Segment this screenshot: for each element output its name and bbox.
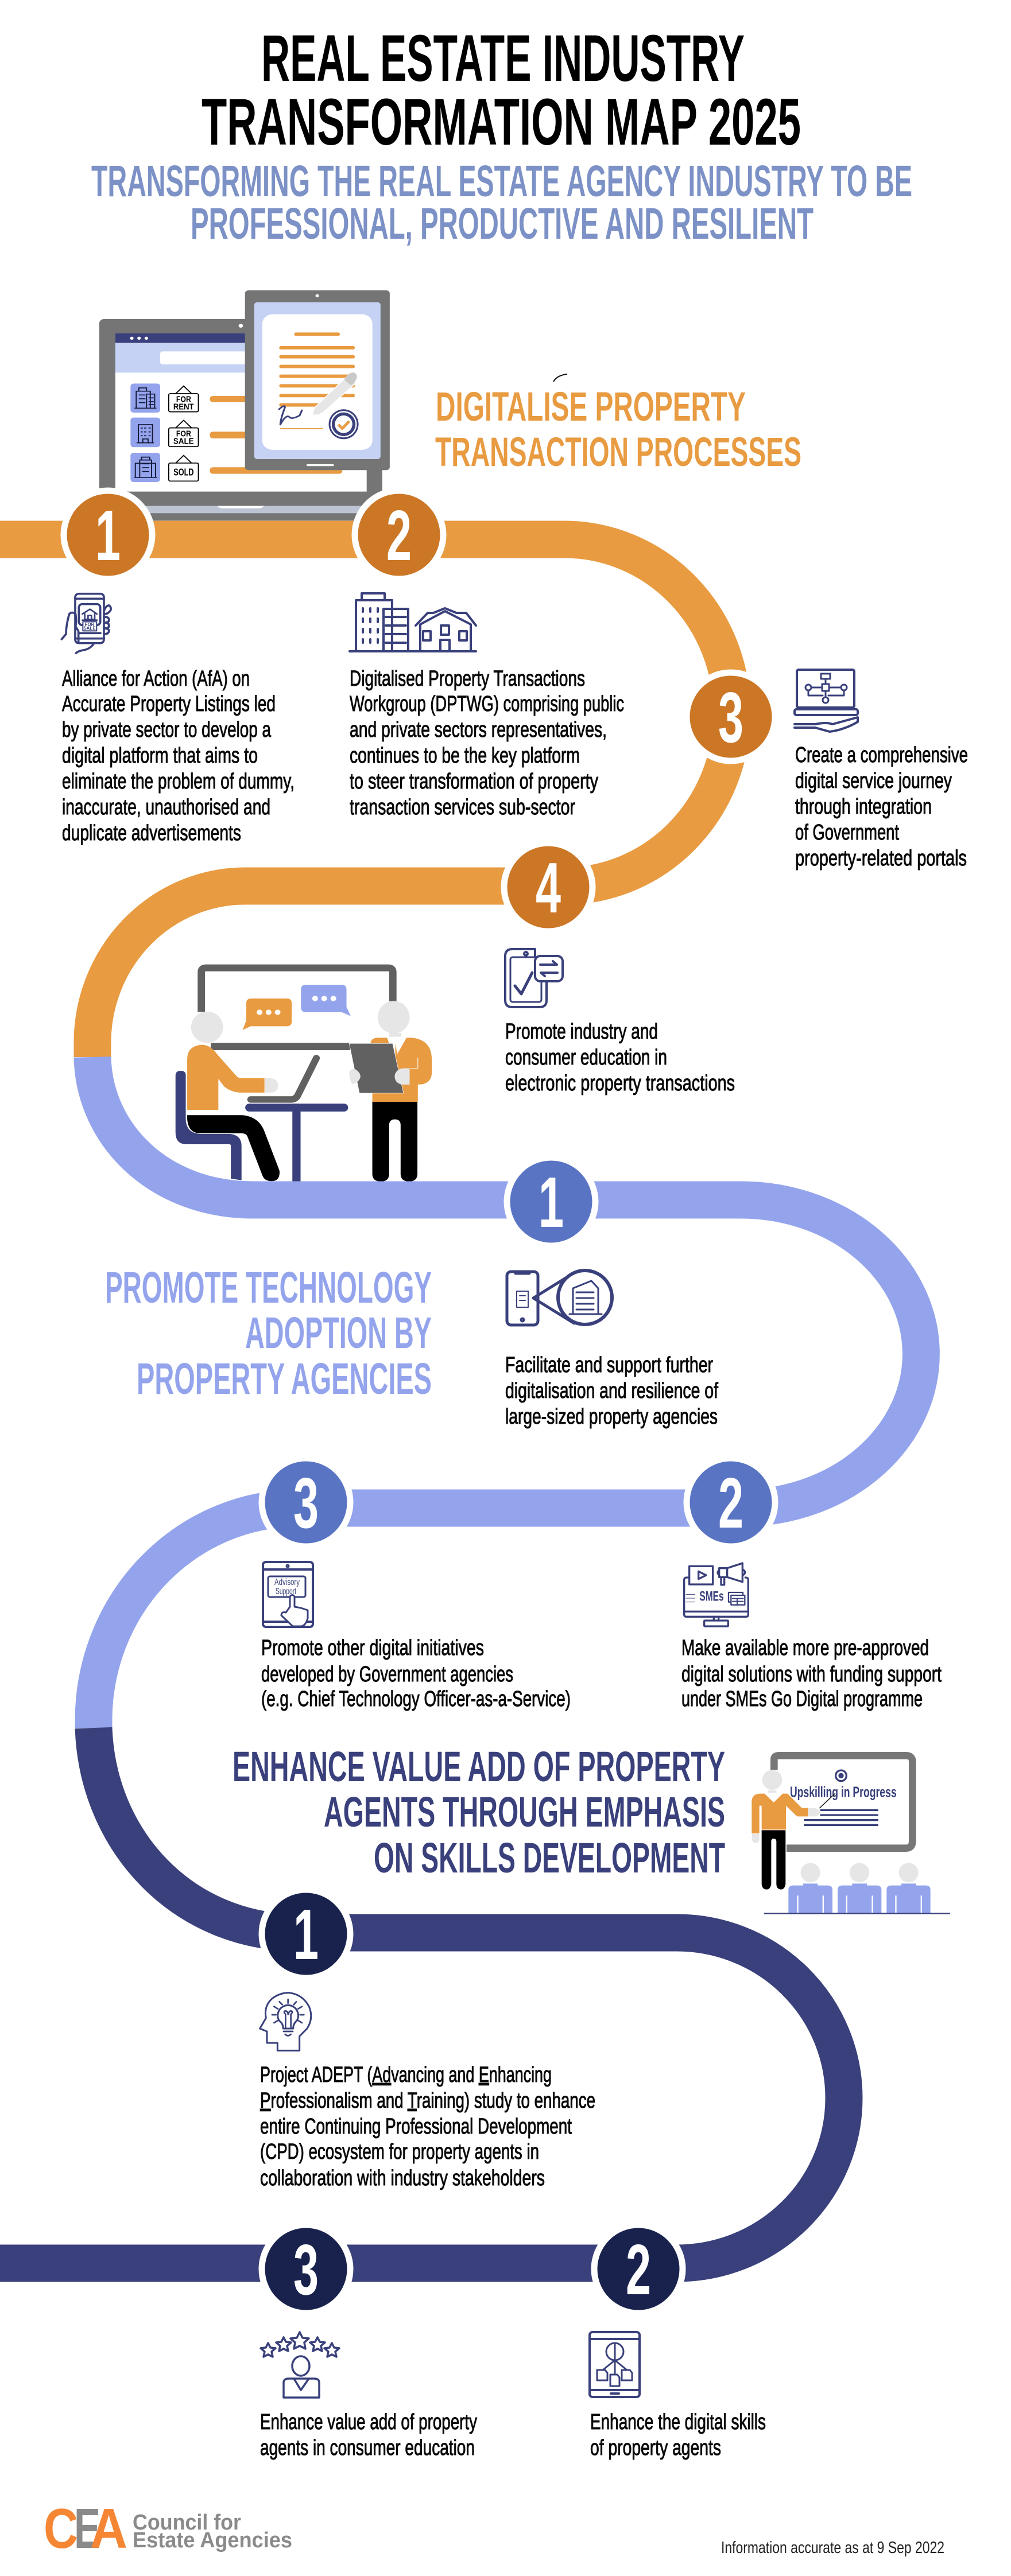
text xyxy=(681,1636,942,1711)
logo: Council for Estate Agencies: E xyxy=(74,2497,100,2560)
text: Promote other digital initiatives xyxy=(261,1636,484,1660)
heading: enhance value add: AGENTS THROUGH EMPHASIS xyxy=(324,1788,725,1836)
text: Enhance value add of property xyxy=(260,2410,477,2434)
road: periwinkle section xyxy=(92,1057,921,1728)
text xyxy=(260,2410,477,2460)
step marker 4 xyxy=(504,843,592,931)
heading: enhance value add xyxy=(233,1743,725,1882)
icon: phone with property listing xyxy=(61,594,111,653)
step marker 2: 2 xyxy=(386,496,412,576)
text xyxy=(260,2063,595,2190)
step marker 1 xyxy=(507,1157,595,1246)
heading: promote technology xyxy=(105,1263,432,1404)
icon: SME monitor with megaphone: SMEs xyxy=(699,1588,724,1604)
road: navy section xyxy=(0,1728,844,2263)
text xyxy=(590,2410,766,2460)
text xyxy=(505,1020,735,1095)
illustration: laptop and tablet with property listings: RENT xyxy=(173,402,194,411)
step marker 2 xyxy=(355,491,443,579)
step marker 3 xyxy=(262,2225,350,2313)
step marker 1 xyxy=(64,491,152,579)
text: entire Continuing Professional Development xyxy=(260,2115,572,2139)
text: Professionalism and Training) study to enhance xyxy=(260,2089,595,2113)
panel: digitalise step 4 xyxy=(504,843,735,1095)
illustration: laptop and tablet with property listings xyxy=(99,290,390,520)
text: developed by Government agencies xyxy=(261,1662,513,1687)
text: collaboration with industry stakeholders xyxy=(260,2166,545,2190)
text: agents in consumer education xyxy=(260,2436,475,2460)
icon: phone linked to office building xyxy=(507,1270,612,1325)
text: consumer education in xyxy=(505,1046,667,1070)
heading: digitalise xyxy=(435,384,801,475)
step marker 3: 3 xyxy=(293,1464,319,1543)
panel: digitalise step 3 xyxy=(687,670,968,871)
step marker 1: 1 xyxy=(95,496,121,576)
illustration: laptop and tablet with property listings: SALE xyxy=(173,437,194,446)
text: digital service journey xyxy=(795,769,952,793)
heading: enhance value add: ON SKILLS DEVELOPMENT xyxy=(374,1834,725,1882)
step marker 1: 1 xyxy=(293,1895,319,1975)
step marker 3: 3 xyxy=(718,678,743,757)
text: digitalisation and resilience of xyxy=(505,1379,718,1403)
step marker 2 xyxy=(687,1458,775,1547)
step marker 3 xyxy=(262,1458,350,1547)
icon: head with light bulb xyxy=(260,1993,311,2050)
logo: Council for Estate Agencies xyxy=(44,2497,292,2560)
text: electronic property transactions xyxy=(505,1071,735,1095)
icon: laptop flowchart and hand xyxy=(795,670,858,732)
step marker 4: 4 xyxy=(536,849,561,928)
decorative stroke mark near heading xyxy=(553,374,567,382)
panel: skills step 2 xyxy=(590,2225,766,2460)
panel: skills step 1 xyxy=(260,1890,595,2190)
heading: digitalise: TRANSACTION PROCESSES xyxy=(435,430,801,475)
text: to steer transformation of property xyxy=(350,770,598,794)
text: Alliance for Action (AfA) on xyxy=(62,667,250,691)
logo: Council for Estate Agencies: C xyxy=(44,2497,78,2560)
illustration: laptop and tablet with property listings: FOR xyxy=(176,395,191,404)
panel: skills step 3 xyxy=(260,2225,477,2460)
step marker 1: 1 xyxy=(539,1163,564,1242)
icon: SME monitor with megaphone xyxy=(684,1563,748,1626)
step marker 2: 2 xyxy=(718,1464,743,1543)
footer note: Information accurate as at 9 Sep 2022 xyxy=(721,2539,944,2557)
illustration: upskilling presentation xyxy=(752,1755,950,1914)
logo: Council for Estate Agencies: A xyxy=(90,2497,127,2560)
heading: enhance value add: ENHANCE VALUE ADD OF PROPERTY xyxy=(233,1743,725,1790)
text: Make available more pre-approved xyxy=(681,1636,929,1660)
logo: Council for Estate Agencies: Council for xyxy=(133,2511,241,2535)
text: digital platform that aims to xyxy=(62,744,258,768)
icon: person with five stars xyxy=(261,2332,339,2398)
step marker 3 xyxy=(687,673,775,761)
text: (e.g. Chief Technology Officer-as-a-Service) xyxy=(261,1687,571,1711)
icon: phone with check and transfer xyxy=(505,949,563,1007)
logo: Council for Estate Agencies: Estate Agencies xyxy=(133,2528,292,2552)
text: and private sectors representatives, xyxy=(350,718,607,742)
text: large-sized property agencies xyxy=(505,1405,718,1429)
text: continues to be the key platform xyxy=(350,744,580,768)
icon: buildings and house xyxy=(350,593,476,651)
text: of Government xyxy=(795,821,899,845)
text: of property agents xyxy=(590,2436,721,2460)
text: through integration xyxy=(795,795,932,819)
text: under SMEs Go Digital programme xyxy=(681,1687,923,1711)
step marker 2 xyxy=(594,2225,683,2313)
step marker 1 xyxy=(262,1890,350,1978)
illustration: laptop and tablet with property listings: SOLD xyxy=(173,467,194,478)
illustration: two people meeting xyxy=(176,968,432,1182)
illustration: laptop and tablet with property listings: FOR xyxy=(176,430,191,438)
heading: digitalise: DIGITALISE PROPERTY xyxy=(436,384,746,430)
text: duplicate advertisements xyxy=(62,821,241,845)
text: Accurate Property Listings led xyxy=(62,692,276,716)
road: orange section xyxy=(0,539,732,1057)
icon: phone with property listing: FOR xyxy=(85,622,95,627)
panel: digitalise step 2 xyxy=(350,491,624,819)
text xyxy=(795,743,968,871)
text: eliminate the problem of dummy, xyxy=(62,770,295,794)
icon: tablet with brain and documents xyxy=(590,2332,640,2397)
winding road xyxy=(0,539,921,2263)
icon: tablet with advisory support button: Support xyxy=(276,1587,296,1596)
text: Digitalised Property Transactions xyxy=(350,667,585,691)
text: Facilitate and support further xyxy=(505,1353,713,1377)
text xyxy=(62,667,295,845)
text: (CPD) ecosystem for property agents in xyxy=(260,2140,539,2164)
icon: phone with property listing: SALE xyxy=(83,626,96,631)
text xyxy=(505,1353,718,1429)
illustration: upskilling presentation: Upskilling in Progress xyxy=(790,1784,897,1801)
heading: promote technology: PROPERTY AGENCIES xyxy=(137,1354,432,1404)
title xyxy=(202,22,801,159)
text xyxy=(261,1636,571,1711)
step marker 2: 2 xyxy=(626,2231,651,2310)
text xyxy=(350,667,624,819)
text: inaccurate, unauthorised and xyxy=(62,795,270,819)
panel: technology step 2 xyxy=(681,1458,942,1711)
text: Enhance the digital skills xyxy=(590,2410,766,2434)
text: by private sector to develop a xyxy=(62,718,272,742)
icon: tablet with advisory support button xyxy=(263,1562,313,1627)
text: transaction services sub-sector xyxy=(350,795,575,819)
panel: digitalise step 1 xyxy=(61,491,295,845)
panel: technology step 3 xyxy=(261,1458,571,1711)
icon: tablet with advisory support button: Advisory xyxy=(274,1578,300,1587)
step marker 3: 3 xyxy=(293,2231,319,2310)
subtitle xyxy=(91,157,912,248)
heading: promote technology: ADOPTION BY xyxy=(245,1308,432,1358)
text: Promote industry and xyxy=(505,1020,658,1044)
text: Project ADEPT (Advancing and Enhancing xyxy=(260,2063,552,2087)
panel: technology step 1 xyxy=(505,1157,718,1429)
text: Workgroup (DPTWG) comprising public xyxy=(350,692,624,716)
heading: promote technology: PROMOTE TECHNOLOGY xyxy=(105,1263,432,1312)
